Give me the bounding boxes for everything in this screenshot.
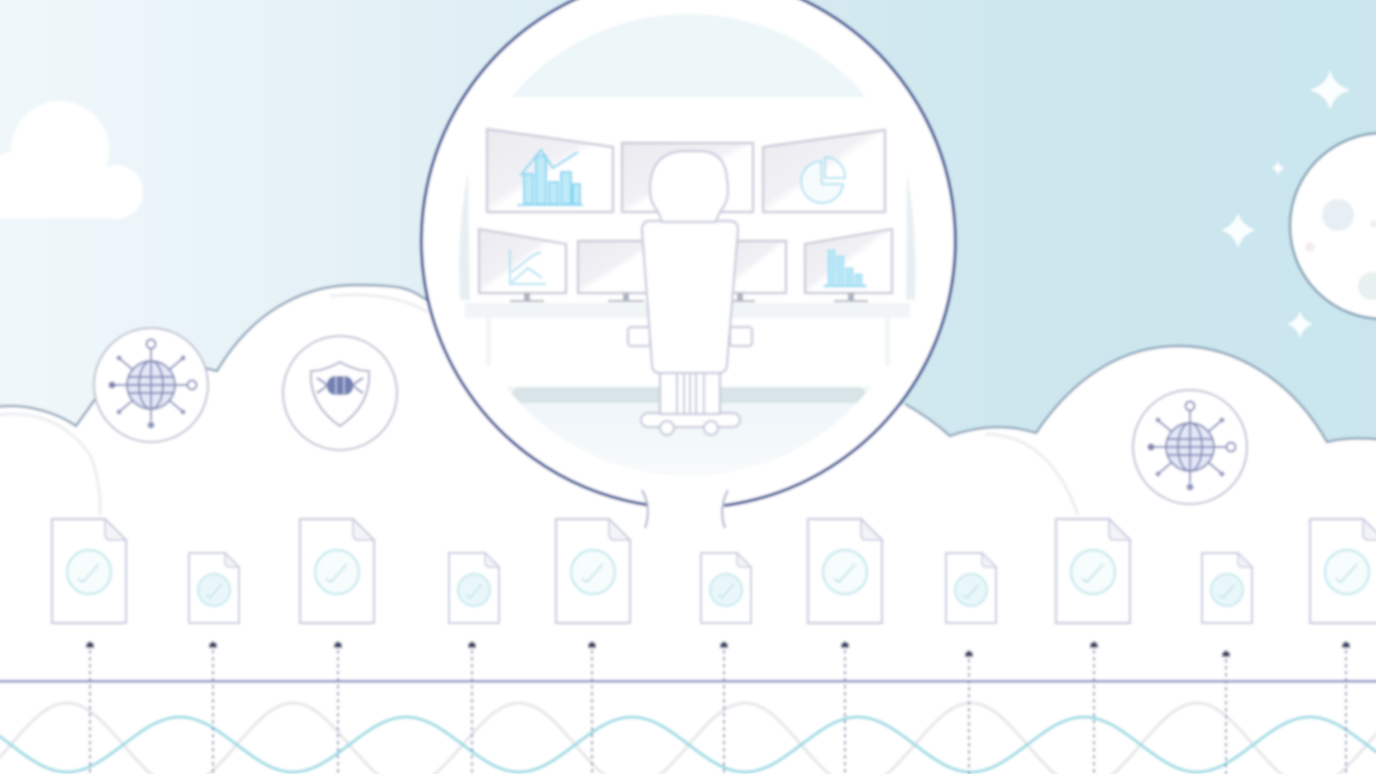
document icons (52, 519, 1376, 623)
armrests (628, 327, 650, 346)
dotted connectors (86, 641, 1350, 774)
room backdrop (508, 14, 869, 474)
stars (1221, 70, 1351, 338)
chair base (641, 413, 740, 435)
cloud bank (0, 285, 1376, 774)
chair legs (660, 372, 720, 414)
monitor stands (510, 293, 868, 302)
icon: cloud in the sky (0, 101, 143, 219)
icon: DNA shield (283, 336, 397, 450)
head (650, 151, 728, 222)
figure: person in chair (628, 151, 752, 435)
monitors (479, 129, 892, 293)
lens outline (421, 0, 955, 506)
timeline rule (0, 680, 1376, 683)
connector notches (642, 490, 728, 528)
chair back (642, 221, 738, 373)
chart: pie (801, 157, 845, 203)
icon: globe network left (94, 328, 208, 442)
side wall panels (459, 172, 916, 300)
wave lines (0, 703, 1376, 774)
chart: bars and trend line (517, 150, 583, 205)
moon (1290, 133, 1376, 319)
chart: small bars (824, 250, 866, 287)
icon: globe network right (1133, 390, 1247, 504)
panel: monitoring room lens (421, 0, 955, 528)
chart: line axes (510, 250, 546, 284)
lens disc (422, 0, 956, 508)
desk (465, 303, 910, 366)
